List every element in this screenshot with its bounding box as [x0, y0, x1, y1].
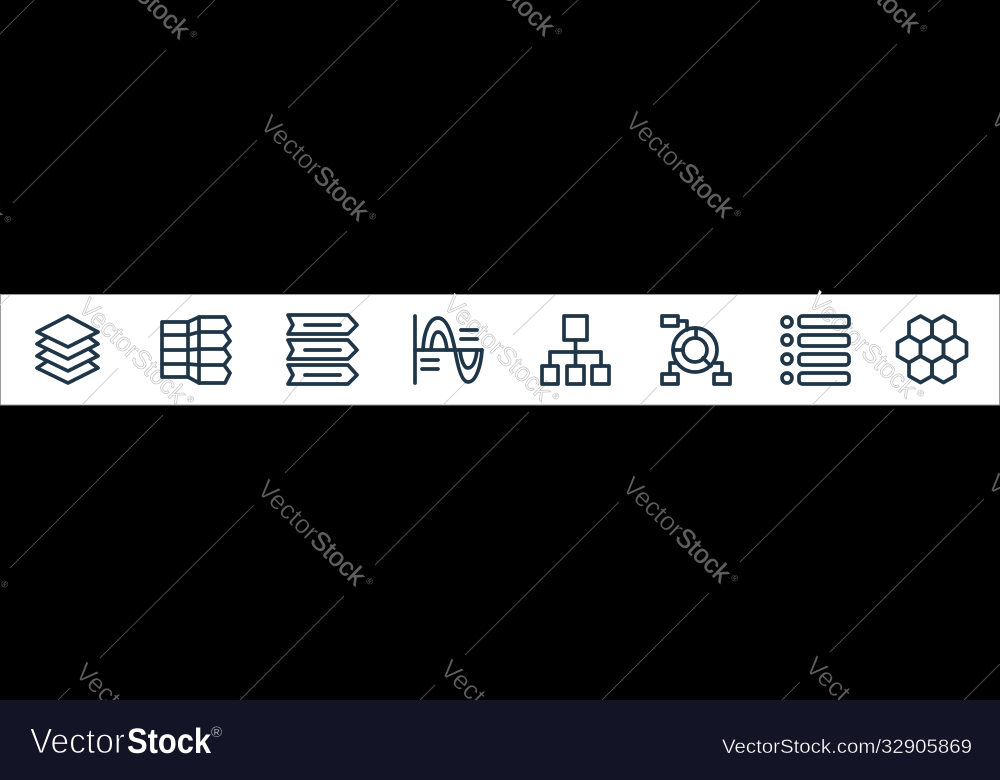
watermark: top row left: ®	[188, 28, 200, 40]
watermark: bottom row right: Vect	[800, 651, 858, 708]
icon: three ribbon arrows	[288, 315, 357, 384]
footer bar	[0, 700, 1000, 780]
watermark: lower row left: ®	[364, 575, 376, 587]
watermark: top row right	[806, 0, 933, 45]
icon: honeycomb	[898, 316, 966, 382]
footer image id: VectorStock.com/32905869	[722, 736, 972, 758]
icon: hierarchy org chart	[542, 316, 609, 384]
watermark: upper row right: ®	[732, 207, 744, 219]
watermark: top row right: ®	[918, 22, 930, 34]
watermark on band: right: ®	[915, 387, 927, 399]
watermark: lower row left: VectorStock	[252, 474, 373, 592]
watermark: top row centre: ®	[553, 25, 565, 37]
white icon band	[0, 294, 1000, 405]
footer logo: Vector	[30, 722, 125, 761]
icon: sine wave chart	[415, 316, 482, 383]
icon: bullet list	[782, 316, 849, 384]
watermark: upper row left: VectorStock	[255, 109, 376, 227]
footer logo	[30, 722, 222, 761]
watermark: upper row left: ®	[367, 210, 379, 222]
watermark: top row left	[76, 0, 203, 51]
watermark on band: right: VectorStock	[803, 286, 924, 404]
icon: folded table with arrow rows	[162, 317, 230, 383]
watermark: upper row far left	[0, 112, 17, 236]
watermark: upper row far left: ®	[2, 213, 14, 225]
watermark on band: centre: ®	[550, 390, 562, 402]
icon: circular diagram with labels	[662, 316, 730, 384]
footer logo: ®	[211, 724, 222, 741]
footer logo: Stock	[127, 722, 211, 761]
watermark on band: left: ®	[185, 393, 197, 405]
watermark: lower row right: ®	[729, 572, 741, 584]
watermark: bottom row left: Vect	[70, 657, 128, 714]
watermark: lower row right: VectorStock	[617, 471, 738, 589]
watermark on band: left: VectorStock	[73, 292, 194, 410]
icon: stacked layers	[37, 316, 98, 383]
watermark: top row centre	[441, 0, 568, 48]
watermark on band: centre: VectorStock	[438, 289, 559, 407]
watermark: upper row right: VectorStock	[620, 106, 741, 224]
watermark: bottom row centre: Vect	[435, 654, 493, 711]
watermark: lower row far left	[0, 477, 14, 601]
